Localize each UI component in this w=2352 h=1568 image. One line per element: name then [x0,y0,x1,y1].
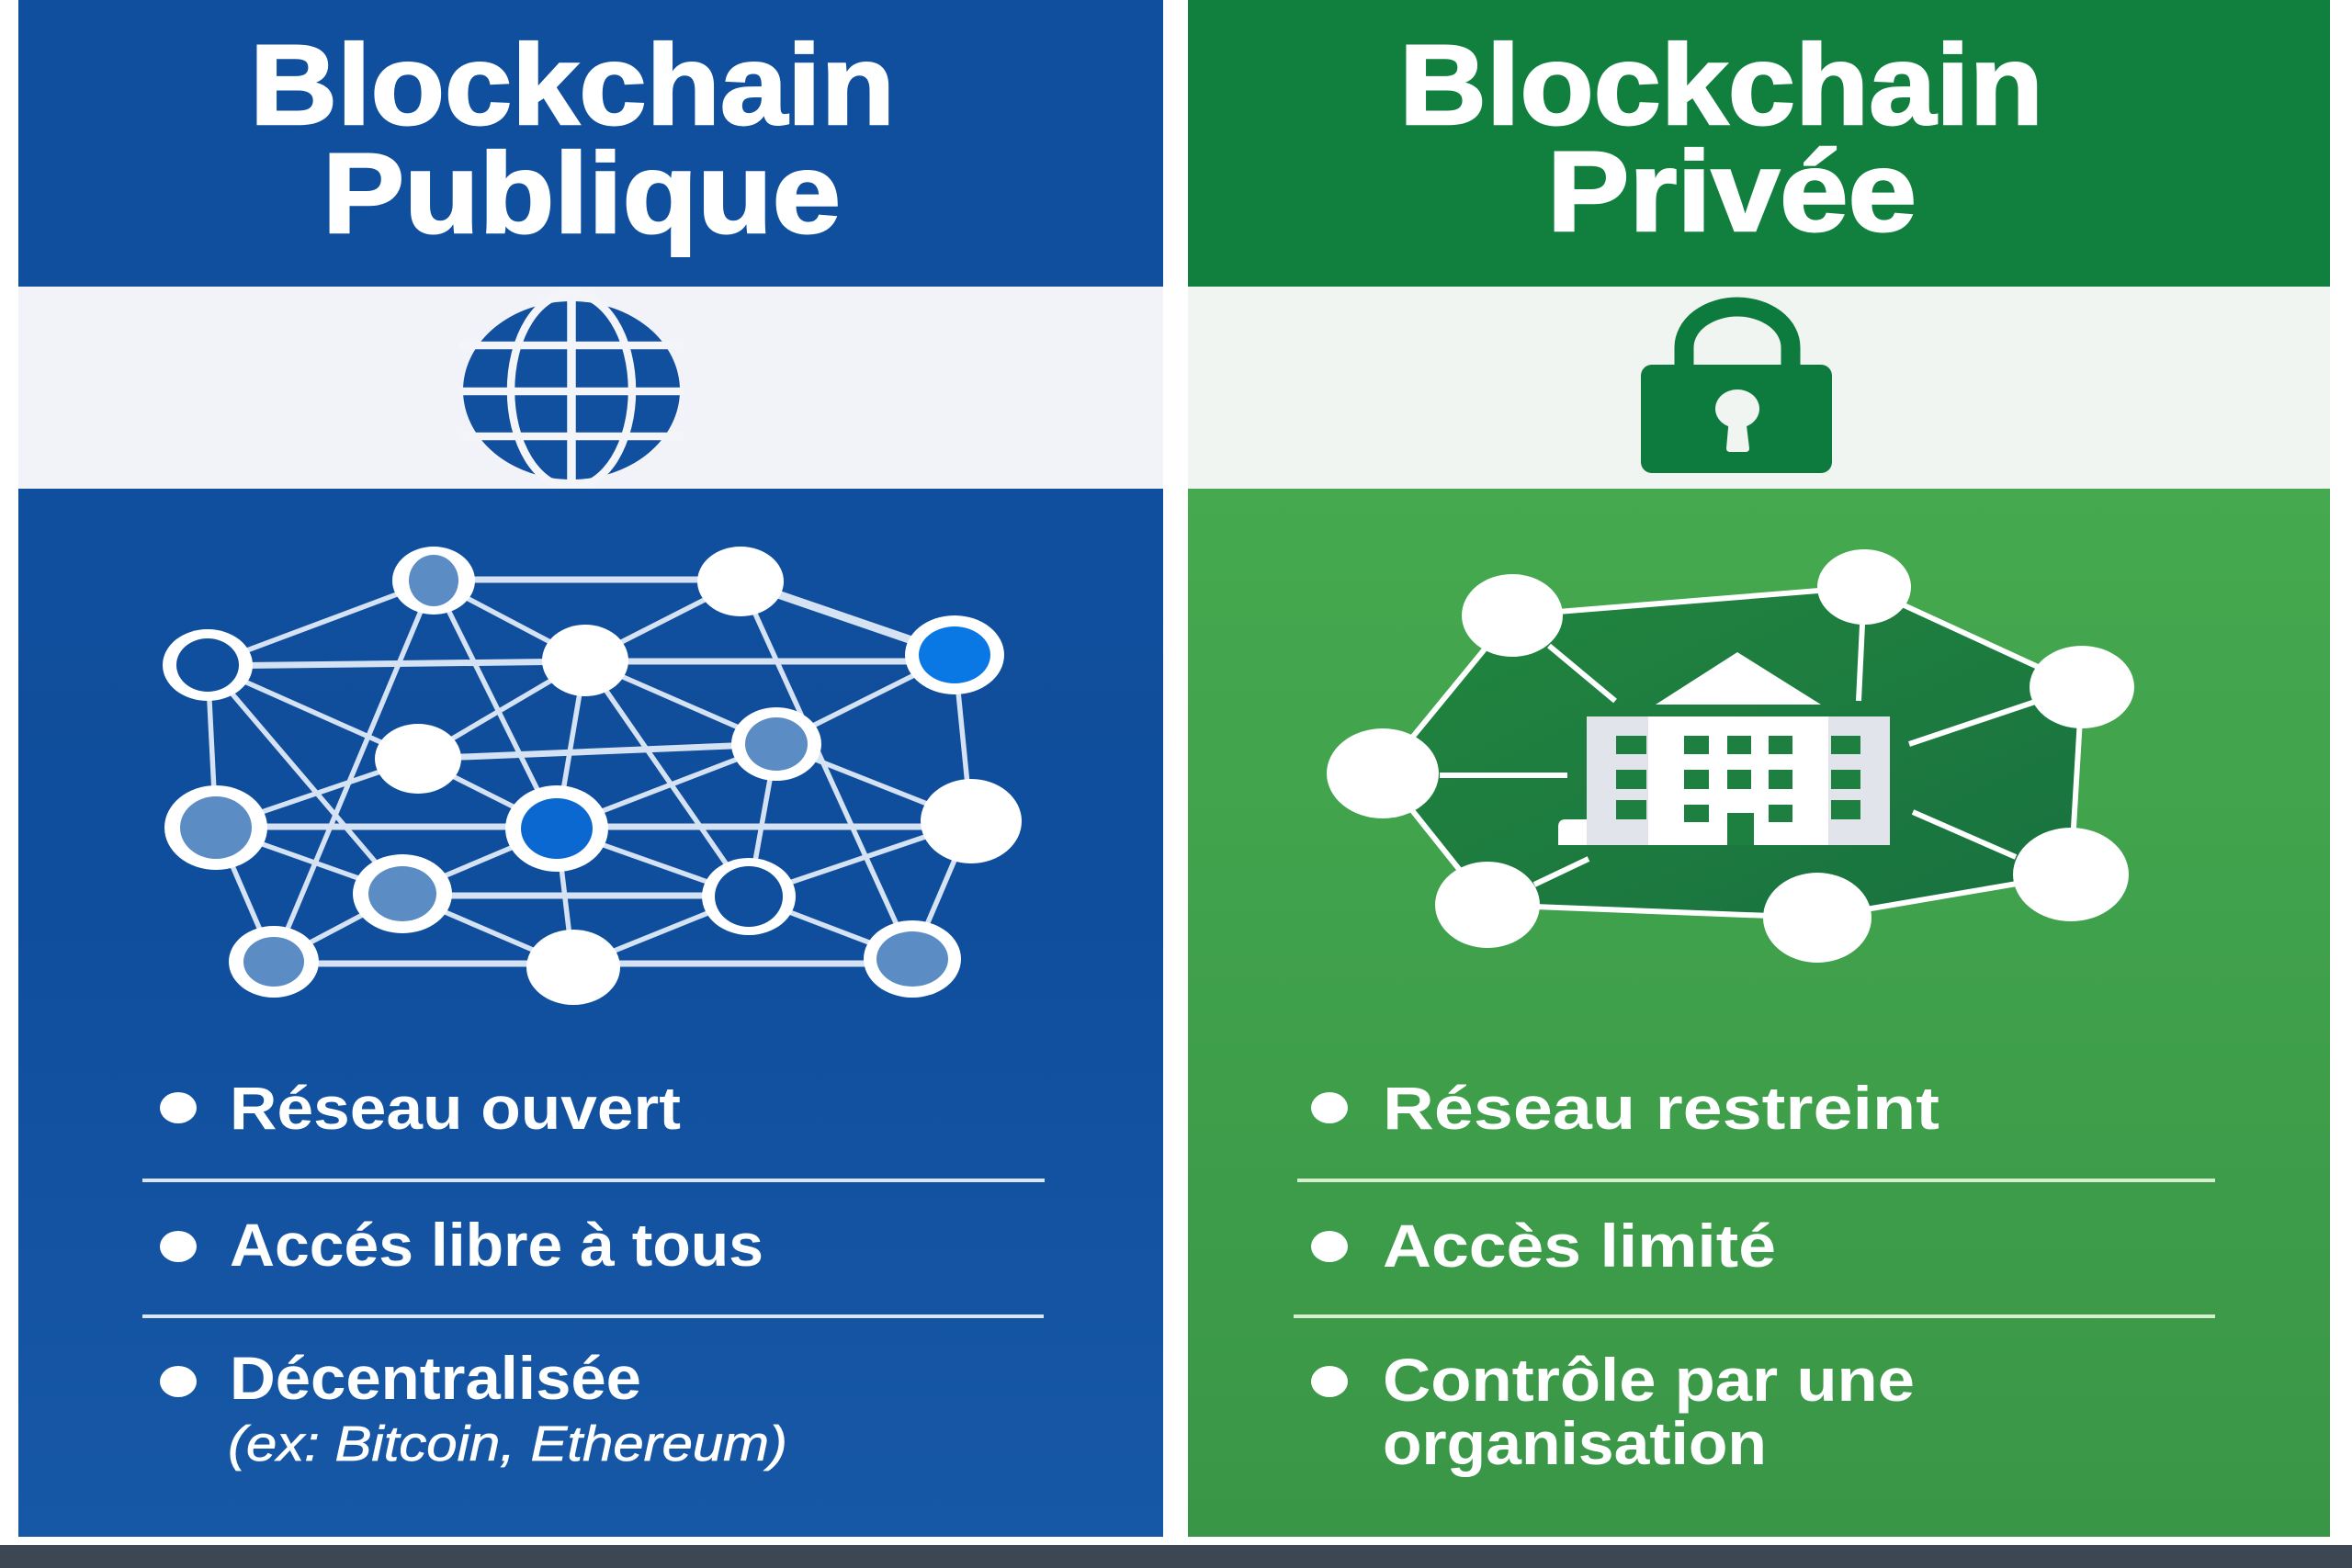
public feature list: (ex: Bitcoin, Ethereum) [228,1416,787,1472]
private body background [1188,489,2330,1537]
private title: Privée [1547,129,1917,255]
public feature list: Accés libre à tous [230,1211,763,1279]
private feature list: Accès limité [1383,1212,1776,1280]
public feature list: Décentralisée [230,1344,641,1412]
public feature list [142,1074,1045,1472]
private feature list [1294,1074,2215,1477]
bottom dark bar [0,1545,2352,1568]
network nodes [163,547,1022,1005]
private title: Blockchain [1399,22,2043,149]
icon: globe [459,293,684,488]
public header band [18,0,1163,287]
private feature list: organisation [1383,1409,1767,1477]
network core area [1383,587,2082,918]
private feature list: Réseau restreint [1383,1074,1939,1142]
public title [250,22,895,257]
public title: Blockchain [250,22,895,149]
private icon band [1188,287,2330,489]
private title [1399,22,2043,255]
public body background [18,489,1163,1537]
public icon band [18,287,1163,489]
private feature list: Contrôle par une [1383,1346,1915,1414]
icon: organisation building [1558,652,1890,845]
public feature list: Réseau ouvert [230,1074,681,1142]
chart: permissioned network [1327,549,2134,963]
panel: private blockchain [1188,0,2330,1537]
icon: padlock [1641,307,1832,473]
chart: decentralised network [163,547,1022,1005]
panel: public blockchain [18,0,1163,1537]
public title: Publique [322,130,841,257]
private header band [1188,0,2330,287]
network nodes [1327,549,2134,963]
